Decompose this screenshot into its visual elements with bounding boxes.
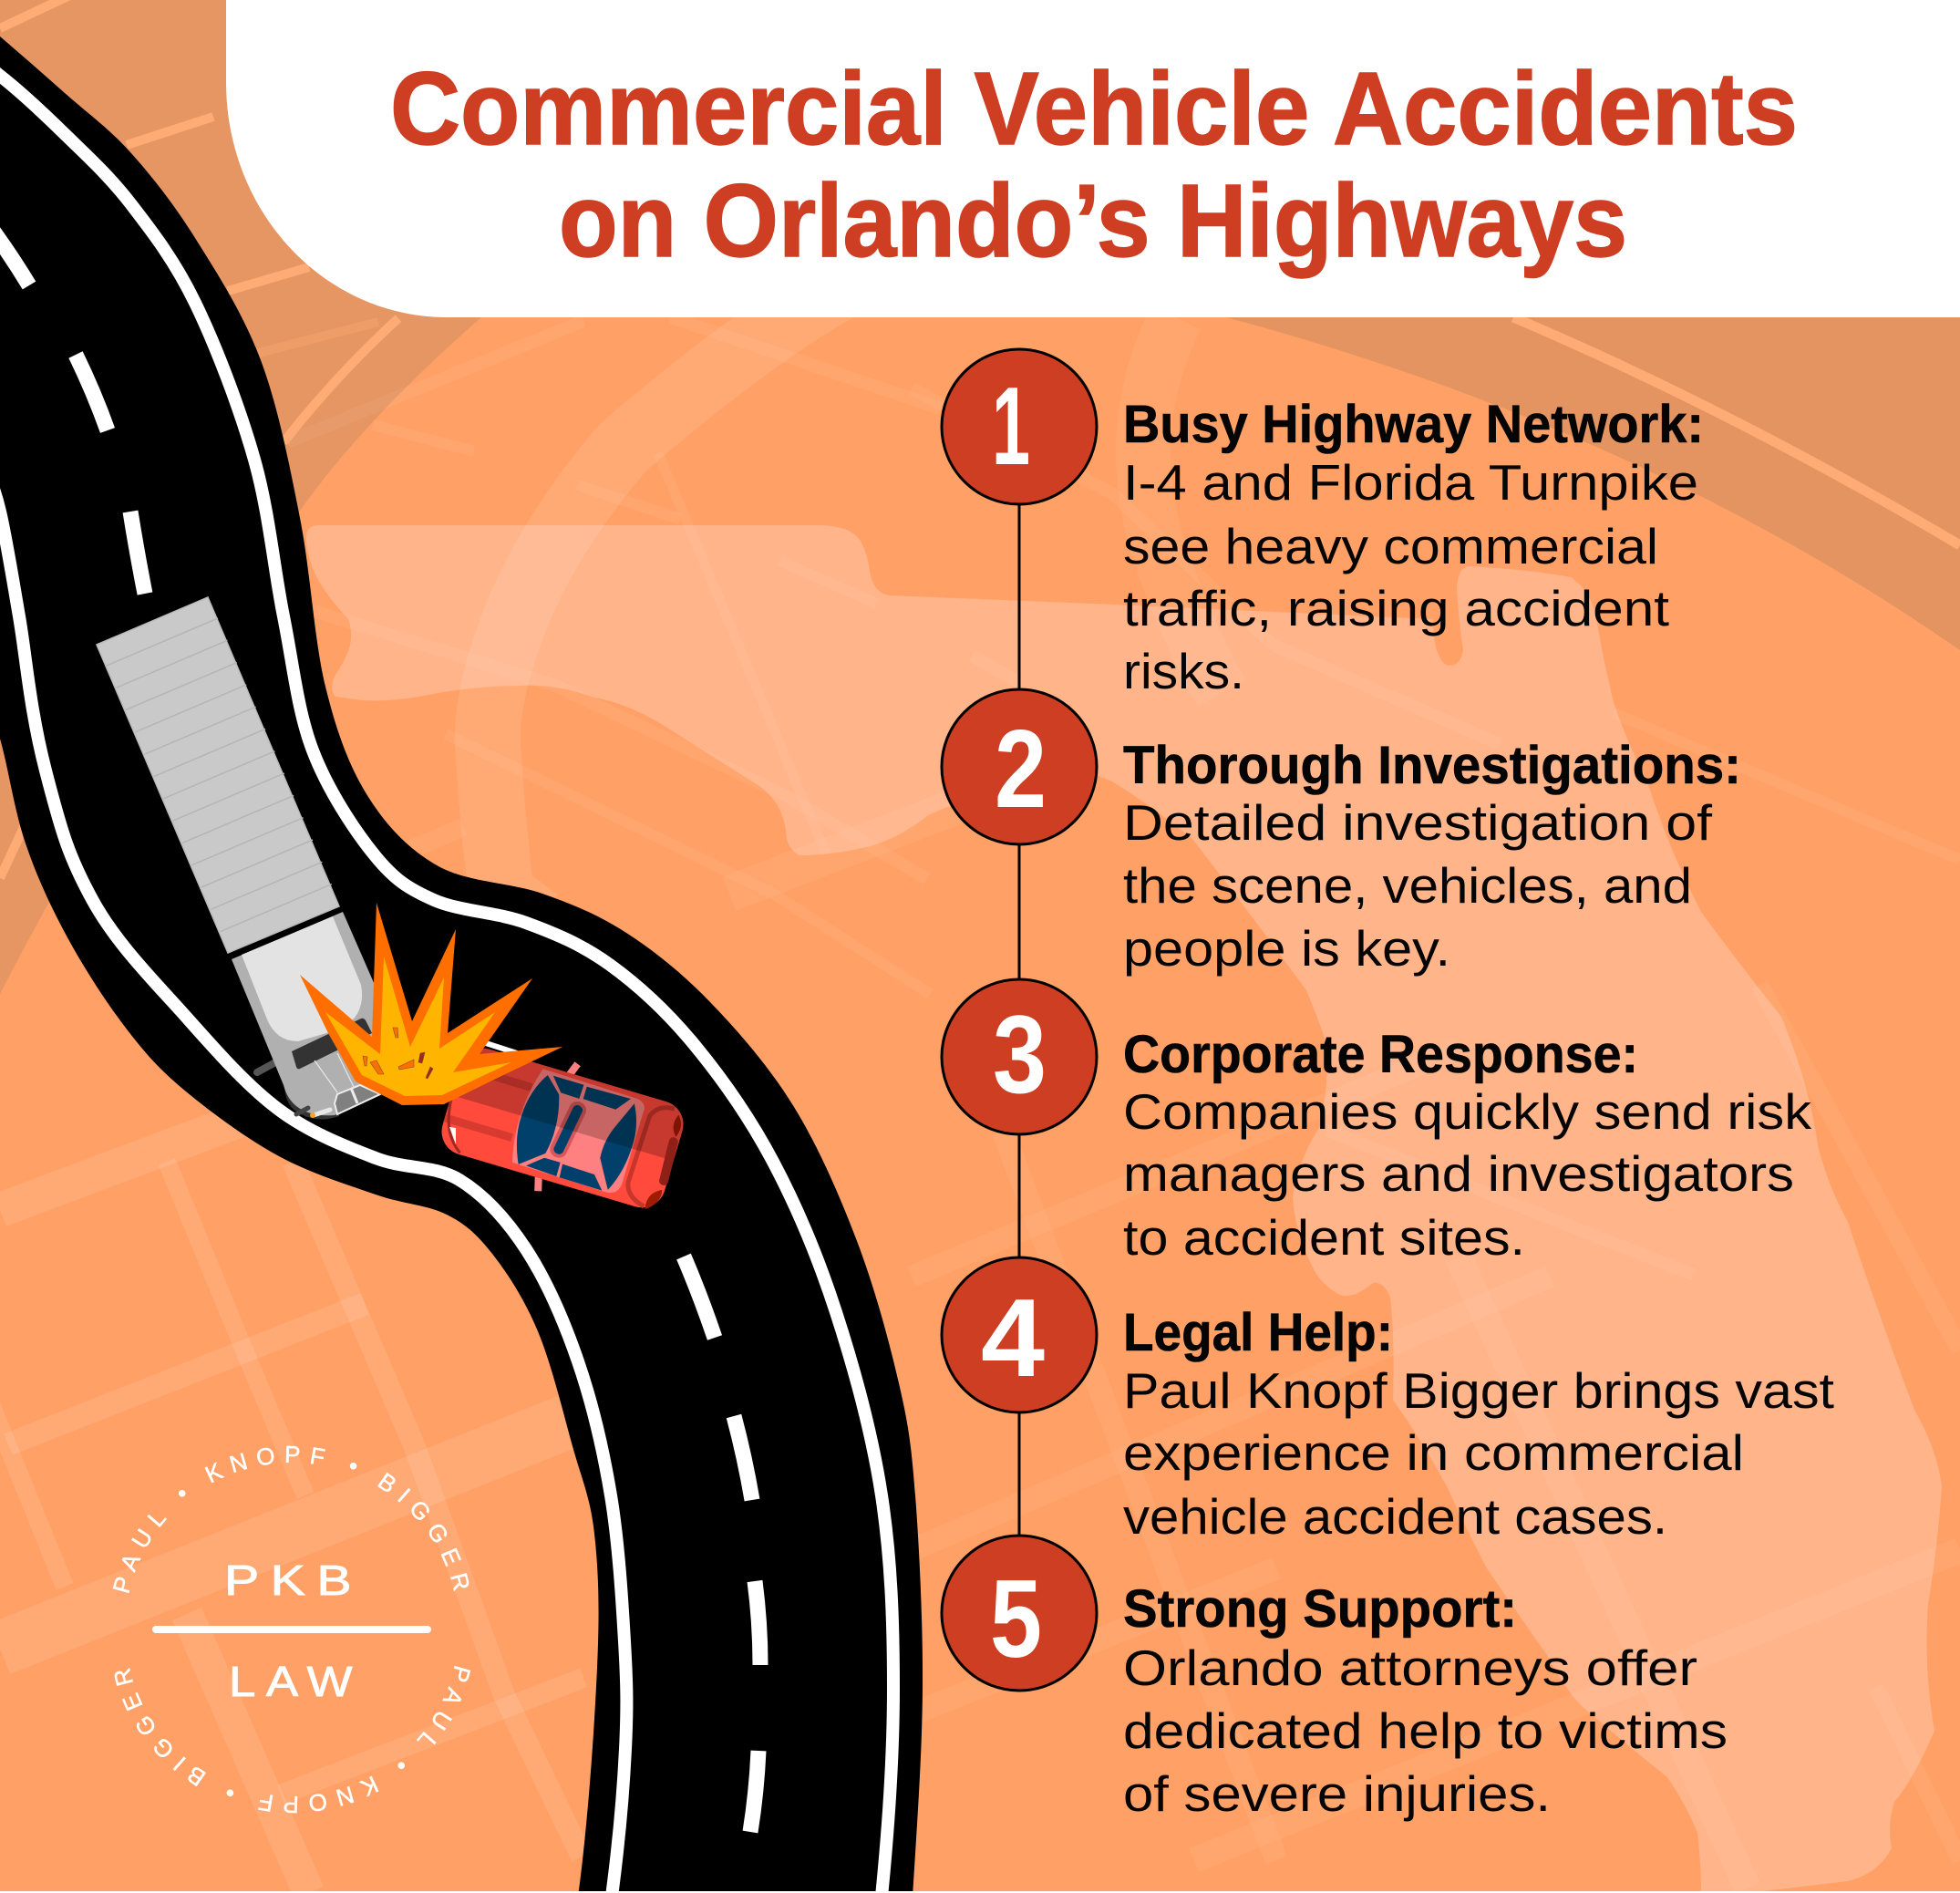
car tail lights (645, 1113, 685, 1213)
step 1 badge (942, 349, 1097, 504)
road right edge line (0, 29, 893, 1893)
logo PKB: PKB (224, 1557, 363, 1604)
truck windshield (292, 1019, 372, 1069)
step 1 heading: Busy Highway Network: (1123, 395, 1704, 454)
step 2 badge: 2 (995, 707, 1047, 831)
car sunroof (550, 1102, 586, 1158)
step 1 body: see heavy commercial (1123, 518, 1658, 574)
step 2 (942, 689, 1741, 977)
car spoiler (662, 1142, 676, 1181)
timeline connector (1017, 427, 1021, 1613)
background: dark wedge upper right (1226, 317, 1960, 650)
logo: PKB Law seal (113, 1446, 470, 1813)
step 5 (942, 1536, 1728, 1822)
step 2 body: people is key. (1123, 920, 1450, 977)
road centre dashes (0, 228, 760, 1832)
truck roof (242, 916, 362, 1041)
car mirrors (533, 1062, 578, 1192)
step 5 body: of severe injuries. (1123, 1765, 1551, 1822)
road (0, 0, 923, 1893)
explosion inner (325, 957, 511, 1096)
car shaded half (451, 1042, 689, 1161)
explosion debris (363, 1028, 433, 1079)
explosion (300, 903, 562, 1105)
step 1 body: risks. (1123, 643, 1244, 699)
car body (436, 1042, 689, 1214)
car front edge (438, 1087, 478, 1153)
background: light streets on dark wedges (0, 0, 1960, 878)
car greenhouse (506, 1067, 647, 1196)
step 4 body: Paul Knopf Bigger brings vast (1123, 1362, 1834, 1419)
truck cab (232, 912, 387, 1115)
truck mirrors (257, 1060, 279, 1072)
step 3 (942, 979, 1812, 1266)
step 2 heading: Thorough Investigations: (1123, 736, 1741, 795)
step 3 body: managers and investigators (1123, 1145, 1794, 1202)
truck hood lines and grille (315, 1053, 380, 1114)
road left edge line (0, 456, 626, 1893)
step 4 body: experience in commercial (1123, 1424, 1744, 1481)
explosion outer (300, 903, 562, 1105)
step 4 heading: Legal Help: (1123, 1303, 1393, 1362)
truck trailer (97, 597, 339, 953)
step 1 body: I-4 and Florida Turnpike (1123, 454, 1698, 511)
logo ring text upper: PAUL • KNOPF • BIGGER (113, 1446, 469, 1594)
step 5 body: dedicated help to victims (1123, 1702, 1728, 1759)
step 5 badge (942, 1536, 1097, 1691)
logo divider (152, 1626, 431, 1633)
step 4 body: vehicle accident cases. (1123, 1488, 1667, 1545)
step 4 (942, 1257, 1834, 1545)
road surface (0, 0, 923, 1893)
step 4 body (1123, 1362, 1834, 1545)
title (390, 51, 1798, 278)
background: dark wedge upper left (0, 0, 481, 994)
truck (97, 597, 387, 1120)
step 2 body: Detailed investigation of (1123, 794, 1713, 851)
step 3 badge (942, 979, 1097, 1134)
background: Florida silhouette (306, 525, 1942, 1893)
car (432, 1032, 692, 1226)
car notch highlights (449, 1042, 517, 1144)
step 3 body (1123, 1083, 1812, 1266)
step 3 heading: Corporate Response: (1123, 1025, 1638, 1084)
step 5 body (1123, 1640, 1728, 1822)
truck headlight (296, 1108, 330, 1118)
step 2 body: the scene, vehicles, and (1123, 857, 1692, 914)
step 2 body (1123, 794, 1713, 977)
title: Commercial Vehicle Accidents (390, 51, 1798, 166)
step 1 body (1123, 454, 1698, 699)
bottom white strip (0, 1891, 1960, 1893)
step 5 body: Orlando attorneys offer (1123, 1640, 1697, 1696)
step 3 body: to accident sites. (1123, 1209, 1525, 1266)
step 5 badge: 5 (990, 1557, 1042, 1681)
step 2 badge (942, 689, 1097, 844)
step 1 badge: 1 (992, 364, 1030, 488)
step 4 badge (942, 1257, 1097, 1412)
step 1 (942, 349, 1704, 699)
logo ring text lower: PAUL • KNOPF • BIGGER (115, 1665, 470, 1813)
truck bumper (284, 1088, 339, 1120)
step 4 badge: 4 (981, 1276, 1045, 1400)
car side stripes (445, 1066, 531, 1139)
step 1 body: traffic, raising accident (1123, 580, 1669, 636)
step 3 badge: 3 (993, 992, 1047, 1116)
title card (226, 0, 1960, 317)
car trunk line (623, 1102, 675, 1206)
car windows (508, 1071, 645, 1195)
logo LAW: LAW (229, 1658, 363, 1705)
step 3 body: Companies quickly send risk (1123, 1083, 1812, 1140)
title: on Orlando’s Highways (559, 163, 1627, 278)
step 5 heading: Strong Support: (1123, 1579, 1517, 1639)
